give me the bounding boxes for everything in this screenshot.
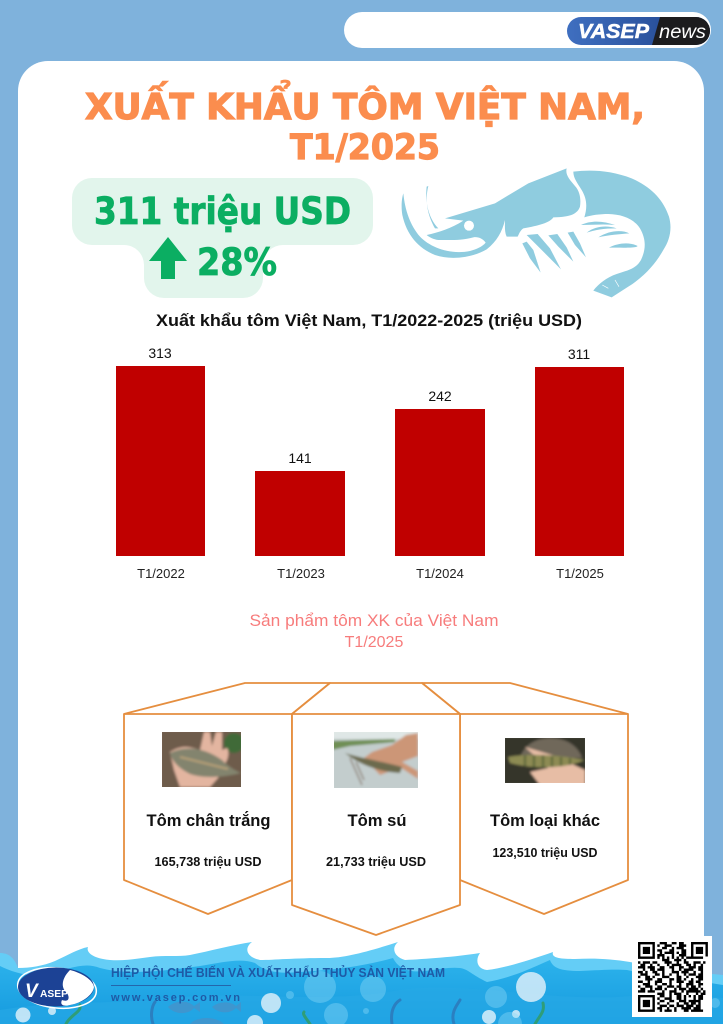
- bar T1/2025: [535, 346, 624, 581]
- photo: banded shrimp over a bowl: [505, 738, 585, 783]
- QR code: [632, 936, 712, 1017]
- fish: [168, 1002, 241, 1024]
- title: [85, 80, 645, 168]
- bar T1/2022: [116, 345, 205, 581]
- VASEP news logo: news: [659, 22, 707, 43]
- card: Tôm chân trắng: Tôm chân trắng: [146, 811, 270, 830]
- seabed swell: [0, 988, 723, 1024]
- bar T1/2024: T1/2024: [416, 566, 464, 581]
- title: XUẤT KHẨU TÔM VIỆT NAM,: [85, 80, 645, 128]
- card: Tôm sú: 21,733 triệu USD: [326, 855, 426, 869]
- card: Tôm sú: Tôm sú: [348, 811, 406, 830]
- photo: white-leg shrimp on a hand: [162, 732, 241, 787]
- bar T1/2023: 141: [288, 450, 312, 466]
- website: www.vasep.com.vn: [110, 992, 240, 1004]
- card outlines: [124, 683, 628, 935]
- footer: sea waves: [0, 942, 723, 1024]
- bar T1/2025: T1/2025: [556, 566, 604, 581]
- bar T1/2024: 242: [428, 388, 452, 404]
- callout: 311 million USD, up 28%: 311 triệu USD: [94, 190, 351, 233]
- VASEP association logo: V: [25, 981, 39, 1002]
- product cards: [124, 683, 628, 935]
- card: Tôm loại khác: 123,510 triệu USD: [492, 846, 598, 860]
- header pill with VASEP news badge: [344, 12, 711, 48]
- VASEP news logo: [567, 17, 710, 45]
- VASEP association logo: [16, 964, 98, 1012]
- section heading: products: T1/2025: [345, 634, 403, 651]
- bar T1/2023: [255, 450, 345, 581]
- card: Tôm loại khác: Tôm loại khác: [490, 811, 600, 830]
- card: Tôm chân trắng: [146, 730, 270, 869]
- icon: up arrow: [149, 237, 187, 279]
- bar T1/2023: T1/2023: [277, 566, 325, 581]
- callout: 311 million USD, up 28%: [72, 178, 373, 298]
- icon: shrimp illustration: [402, 168, 670, 297]
- bar T1/2022: T1/2022: [137, 566, 185, 581]
- bar T1/2022: 313: [148, 345, 172, 361]
- callout: 311 million USD, up 28%: 28%: [197, 241, 277, 284]
- section heading: products: Sản phẩm tôm XK của Việt Nam: [250, 611, 498, 630]
- photo: tiger shrimp held over a pond: [334, 732, 418, 788]
- bar T1/2025: 311: [568, 346, 590, 362]
- card: Tôm sú: [326, 730, 426, 869]
- card: Tôm loại khác: [490, 736, 600, 860]
- chart title: Xuất khẩu tôm Việt Nam, T1/2022-2025 (triệu USD): [156, 311, 582, 330]
- bar T1/2024: [395, 388, 485, 581]
- seaweed: [66, 1000, 543, 1024]
- card: Tôm chân trắng: 165,738 triệu USD: [154, 855, 262, 869]
- section heading: products: [250, 611, 498, 651]
- bubbles: [16, 971, 720, 1024]
- VASEP association logo: ASEP: [40, 988, 68, 1000]
- bar chart: [116, 345, 624, 581]
- association name: HIỆP HỘI CHẾ BIẾN VÀ XUẤT KHẨU THỦY SẢN VIỆT NAM: [111, 965, 445, 980]
- VASEP news logo: VASEP: [578, 21, 650, 43]
- shrimp eye: [464, 221, 474, 231]
- title: T1/2025: [290, 128, 440, 168]
